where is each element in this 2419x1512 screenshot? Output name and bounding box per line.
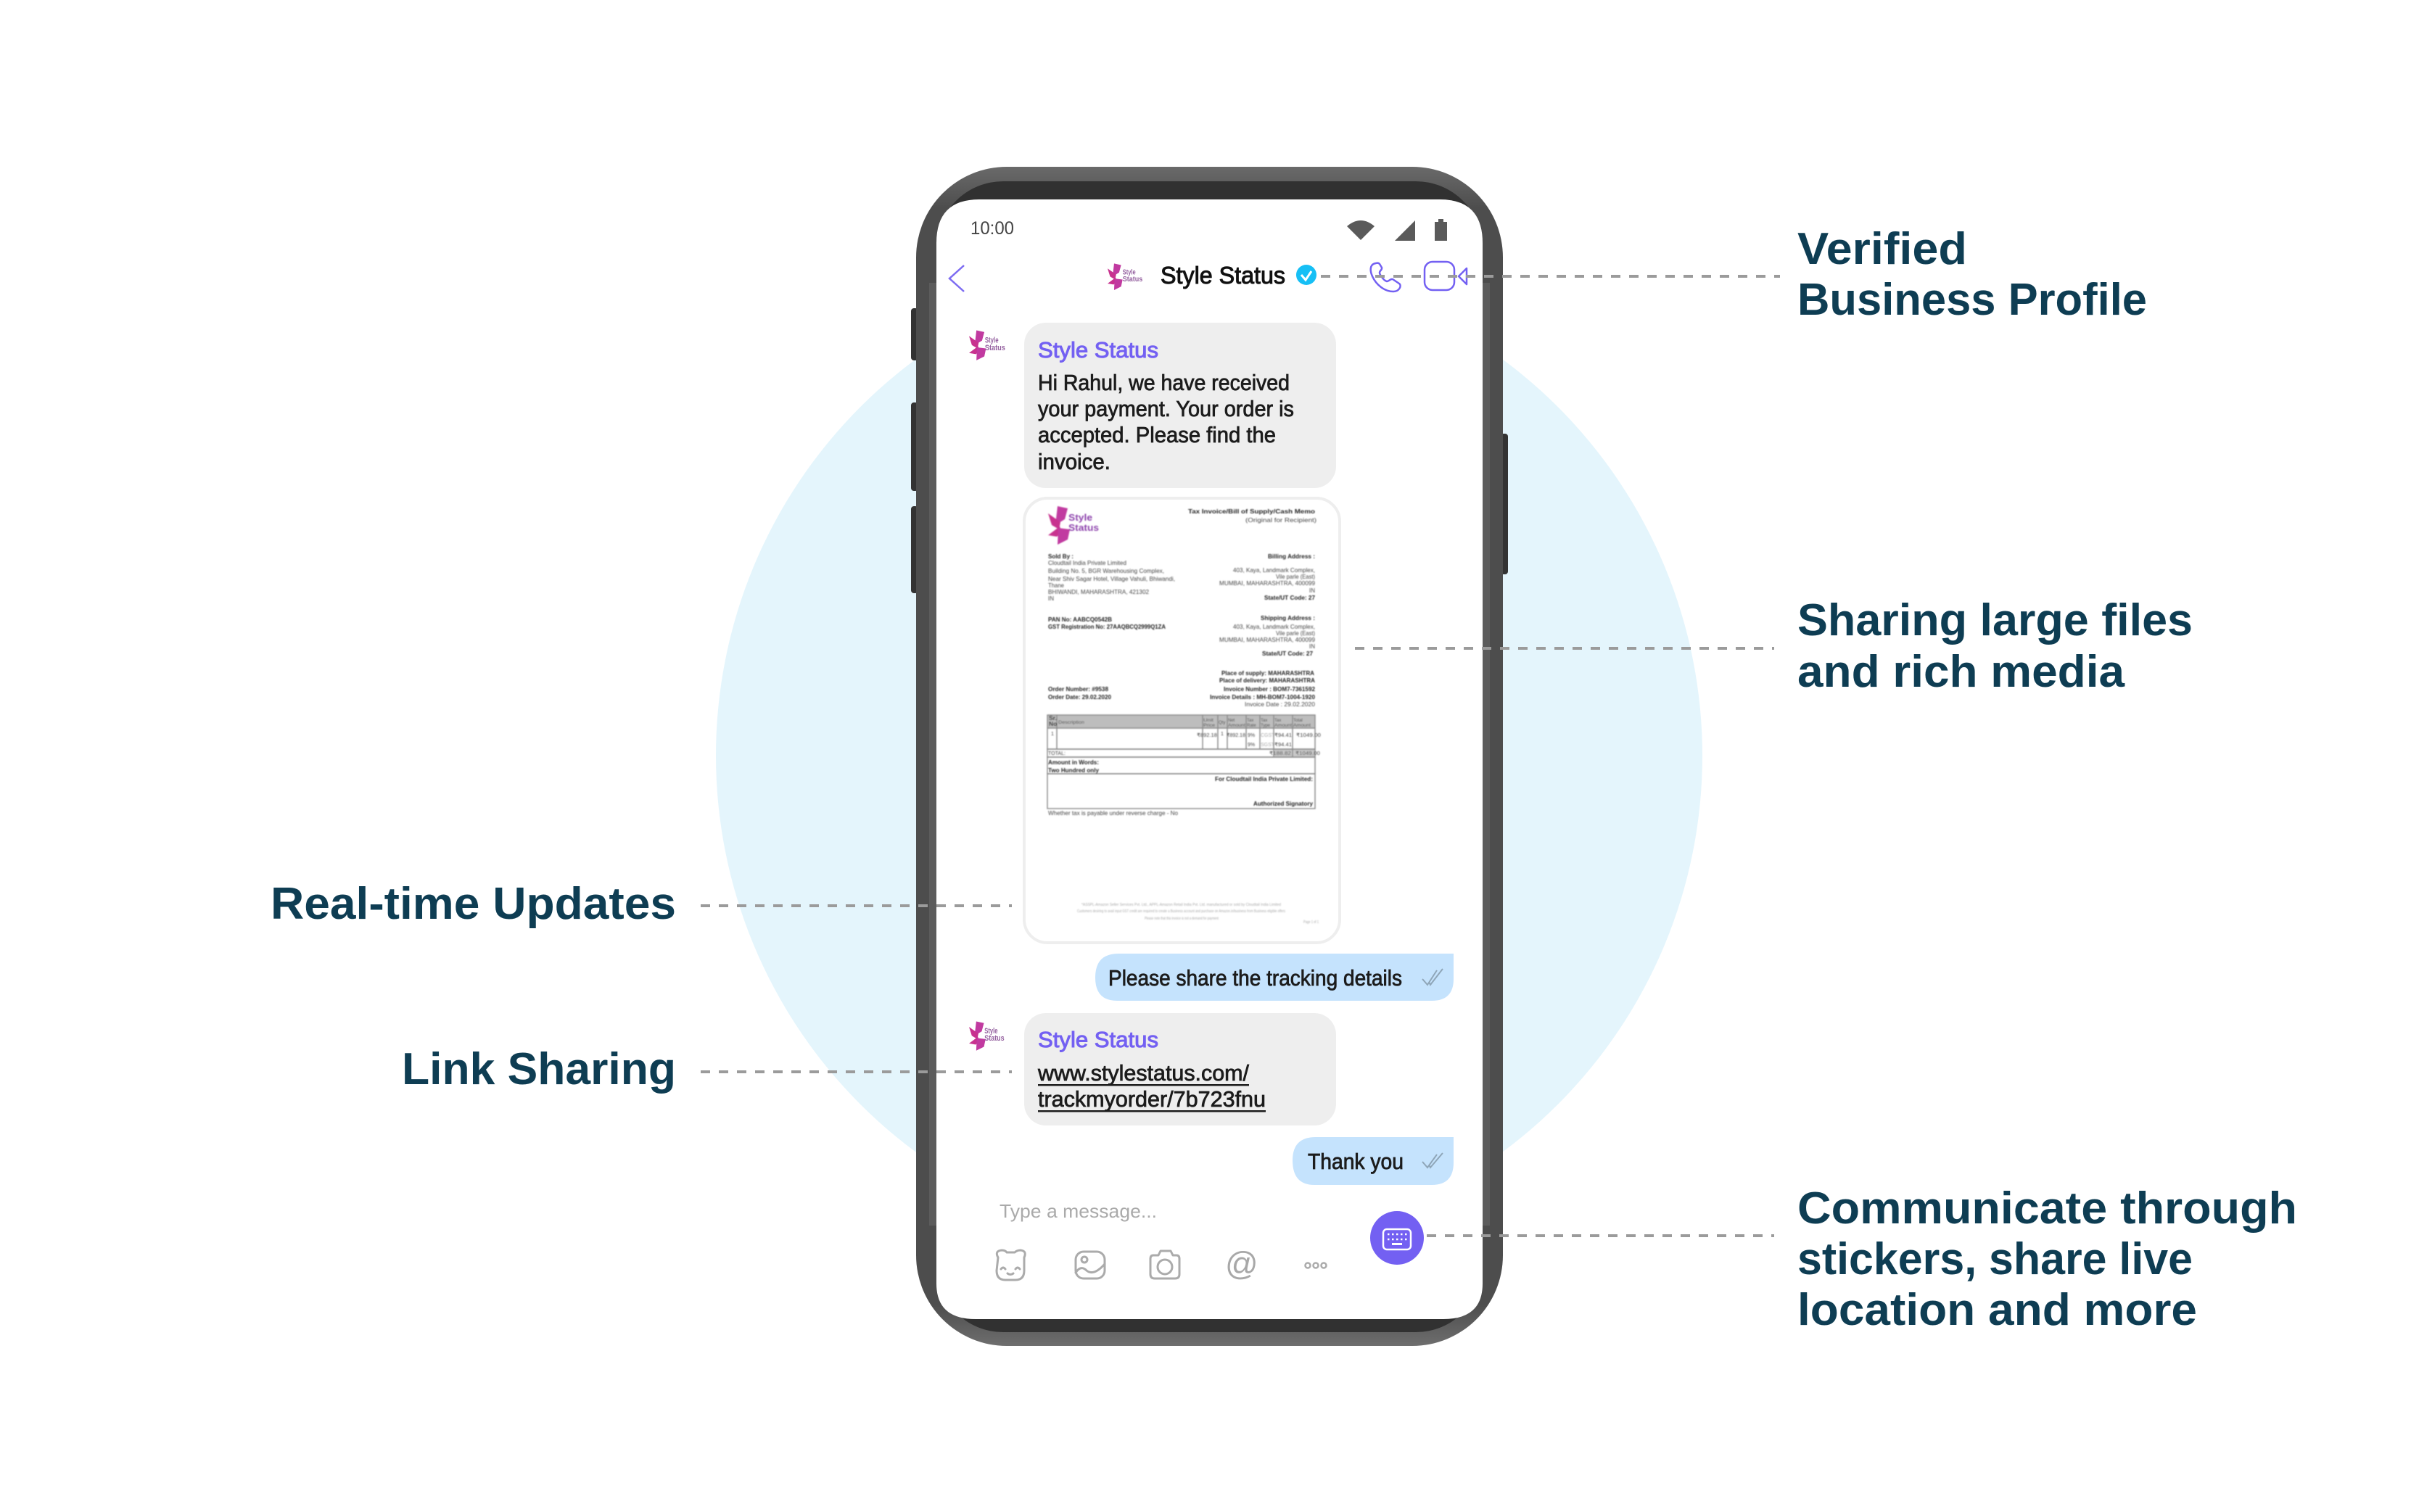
billing and shipping details: Invoice Details : MH-BOM7-1004-1920 — [1210, 693, 1315, 701]
avatar logo — [969, 1022, 1005, 1051]
invoice table: 1 — [1051, 732, 1054, 737]
message bubble — [1024, 323, 1336, 488]
invoice table: Amount — [1293, 724, 1311, 728]
message bubble: trackmyorder/7b723fnu — [1038, 1086, 1266, 1112]
invoice logo: Status — [1068, 522, 1099, 533]
label: communicate through stickers — [1797, 1183, 2297, 1335]
seller details: GST Registration No: 27AAQBCQ2999Q1ZA — [1048, 623, 1166, 630]
message bubble: accepted. Please find the — [1038, 422, 1276, 447]
seller details: Near Shiv Sagar Hotel, Village Vahuli, Bhiwandi, — [1048, 575, 1175, 582]
invoice header text: (Original for Recipient) — [1245, 516, 1316, 524]
billing and shipping details: 403, Kaya, Landmark Complex, — [1233, 566, 1315, 574]
header logo: Style — [1123, 269, 1136, 277]
billing and shipping details: 403, Kaya, Landmark Complex, — [1233, 623, 1315, 630]
phone frame — [916, 167, 1503, 1346]
connector: verified business profile — [1321, 275, 1780, 278]
invoice table: ₹892.18 — [1197, 732, 1217, 738]
invoice table: Tax — [1247, 719, 1253, 723]
billing and shipping details: Vile parle (East) — [1276, 573, 1315, 580]
invoice table: Two Hundred only — [1048, 767, 1099, 774]
invoice table: 1 — [1221, 732, 1224, 737]
header logo — [1108, 263, 1143, 290]
billing and shipping details: State/UT Code: 27 — [1264, 594, 1315, 601]
invoice contents — [1047, 506, 1321, 925]
seller details — [1048, 553, 1175, 701]
invoice logo: Style — [1068, 512, 1092, 523]
label: sharing large files — [1797, 595, 2193, 697]
invoice table: Unit — [1203, 719, 1213, 723]
connector: sharing large files — [1355, 647, 1774, 650]
invoice footer text: Page 1 of 1 — [1303, 920, 1319, 925]
outgoing message: tracking — [1095, 954, 1454, 1001]
invoice footer text — [1077, 903, 1319, 925]
message bubble: www.stylestatus.com/ — [1037, 1060, 1249, 1086]
invoice footer text: Please note that this invoice is not a demand for payment — [1145, 917, 1219, 921]
seller details: Building No. 5, BGR Warehousing Complex, — [1048, 567, 1164, 574]
invoice table: ₹1049.00 — [1296, 732, 1321, 738]
invoice table: CGST — [1261, 733, 1275, 738]
seller details: Order Date: 29.02.2020 — [1048, 693, 1111, 701]
icon: more dots — [1306, 1263, 1326, 1268]
invoice footer text: *ASSPL-Amazon Seller Services Pvt. Ltd., APPL-Amazon Retail India Pvt. Ltd. manufactured or sold by Cloudtail India Limited — [1081, 903, 1281, 907]
message bubble — [1024, 1013, 1336, 1125]
invoice table: Qty — [1219, 721, 1225, 725]
label: verified business profile — [1797, 224, 2147, 325]
background circle — [716, 263, 1702, 1249]
invoice table: Tax — [1274, 719, 1281, 723]
billing and shipping details: Place of delivery: MAHARASHTRA — [1219, 677, 1315, 684]
avatar logo: Status — [985, 344, 1005, 352]
label: verified business profile: Verified — [1797, 224, 1967, 274]
invoice header text — [1188, 508, 1316, 524]
invoice footer text: Customers desiring to avail input GST credit are required to create a Business account and purchase on Amazon.in/business from Business eligible offers — [1077, 909, 1285, 914]
seller details: Order Number: #9538 — [1048, 685, 1108, 693]
invoice table: 9% — [1248, 733, 1255, 738]
avatar logo: Status — [984, 1034, 1005, 1043]
label: link sharing: Link Sharing — [402, 1044, 676, 1094]
invoice table: ₹94.41 — [1274, 742, 1292, 748]
billing and shipping details — [1210, 553, 1315, 708]
seller details: Sold By : — [1048, 553, 1073, 560]
icon: keyboard button — [1370, 1211, 1424, 1265]
label: real-time updates: Real-time Updates — [271, 879, 676, 929]
billing and shipping details: Invoice Date : 29.02.2020 — [1245, 701, 1315, 708]
invoice document card — [1024, 498, 1340, 943]
invoice table: ₹1049.00 — [1295, 751, 1320, 756]
connector: link sharing — [701, 1070, 1012, 1073]
invoice table: Rate — [1247, 724, 1256, 728]
invoice table: 9% — [1248, 743, 1255, 748]
invoice table: ₹892.18 — [1227, 732, 1245, 738]
seller details: IN — [1048, 595, 1054, 602]
icon: camera — [1150, 1251, 1179, 1278]
invoice header text: Tax Invoice/Bill of Supply/Cash Memo — [1188, 508, 1315, 515]
icon: image — [1076, 1252, 1105, 1278]
input placeholder: Type a message... — [1000, 1200, 1157, 1222]
icon: battery — [1435, 219, 1447, 241]
frame edge highlights — [929, 283, 1490, 1226]
invoice table: Type — [1261, 724, 1271, 728]
outgoing message: thank you — [1293, 1137, 1454, 1185]
phone — [911, 167, 1508, 1346]
billing and shipping details: Invoice Number : BOM7-7361592 — [1224, 685, 1315, 693]
message bubble: Style Status — [1038, 1027, 1158, 1052]
seller details: Cloudtail India Private Limited — [1048, 559, 1126, 566]
billing and shipping details: IN — [1309, 643, 1315, 650]
invoice table: Price — [1203, 724, 1216, 728]
invoice table: Authorized Signatory — [1253, 800, 1313, 807]
invoice logo — [1048, 506, 1099, 545]
icon: phone call — [1371, 263, 1401, 292]
avatar logo — [969, 331, 1005, 360]
icon: sticker bear — [997, 1250, 1025, 1280]
billing and shipping details: State/UT Code: 27 — [1262, 650, 1313, 657]
header logo: Status — [1123, 276, 1143, 284]
invoice table: ₹188.82 — [1269, 751, 1291, 756]
billing and shipping details: IN — [1309, 587, 1315, 594]
invoice table: TOTAL: — [1048, 751, 1066, 756]
outgoing message: thank you: Thank you — [1308, 1149, 1404, 1174]
inner dark bezel — [936, 181, 1483, 1332]
billing and shipping details: Vile parle (East) — [1276, 629, 1315, 637]
invoice table: Tax — [1261, 719, 1267, 723]
invoice table: For Cloudtail India Private Limited: — [1215, 775, 1313, 782]
billing and shipping details: Billing Address : — [1268, 553, 1315, 560]
invoice table: Amount in Words: — [1048, 759, 1099, 766]
message bubble: Hi Rahul, we have received — [1038, 370, 1290, 395]
business name: Style Status — [1161, 262, 1285, 289]
invoice table: Description — [1058, 721, 1084, 725]
icon: read ticks — [1422, 969, 1443, 985]
incoming message: tracking link — [969, 1013, 1336, 1125]
message bubble: Style Status — [1038, 337, 1158, 363]
invoice table — [1047, 714, 1321, 817]
invoice table: Whether tax is payable under reverse charge - No — [1048, 809, 1178, 817]
invoice table: Sr. — [1049, 714, 1057, 722]
connector: real-time updates — [701, 904, 1012, 907]
icon: read ticks — [1422, 1153, 1443, 1168]
avatar logo: Style — [985, 336, 999, 345]
screen — [936, 199, 1483, 1319]
label: communicate through stickers: Communicate through — [1797, 1183, 2297, 1234]
avatar logo: Style — [984, 1027, 998, 1036]
seller details: BHIWANDI, MAHARASHTRA, 421302 — [1048, 588, 1149, 595]
message composer — [997, 1200, 1424, 1282]
icon: signal — [1395, 220, 1415, 241]
invoice table: Net — [1228, 719, 1235, 723]
billing and shipping details: MUMBAI, MAHARASHTRA, 400099 — [1219, 636, 1315, 643]
seller details: Thane — [1048, 582, 1064, 589]
invoice table: SGST — [1261, 743, 1275, 748]
outgoing message: tracking: Please share the tracking details — [1108, 965, 1402, 991]
billing and shipping details: Place of supply: MAHARASHTRA — [1221, 669, 1314, 677]
invoice table: Amount — [1274, 724, 1292, 728]
status bar — [971, 218, 1447, 241]
invoice table: Amount — [1228, 724, 1245, 728]
side buttons — [911, 308, 1508, 593]
icon: mention: @ — [1225, 1245, 1258, 1282]
time: 10:00 — [971, 218, 1014, 239]
billing and shipping details: MUMBAI, MAHARASHTRA, 400099 — [1219, 579, 1315, 587]
seller details: PAN No: AABCQ0542B — [1048, 616, 1112, 623]
label: sharing large files: Sharing large files — [1797, 595, 2193, 645]
label: communicate through stickers: stickers, share live — [1797, 1234, 2193, 1284]
icon: back chevron — [949, 265, 964, 292]
chat header — [949, 262, 1467, 292]
label: communicate through stickers: location and more — [1797, 1285, 2197, 1335]
connector: stickers and location — [1427, 1234, 1774, 1237]
icon: video call — [1425, 262, 1467, 290]
label: verified business profile: Business Profile — [1797, 275, 2147, 325]
message bubble: invoice. — [1038, 449, 1110, 474]
billing and shipping details: Shipping Address : — [1261, 614, 1315, 621]
icon: verified badge — [1296, 265, 1316, 285]
incoming message: payment — [969, 323, 1336, 488]
invoice table: ₹94.41 — [1274, 732, 1292, 738]
label: sharing large files: and rich media — [1797, 647, 2125, 697]
invoice table: Total — [1293, 719, 1303, 723]
message bubble: your payment. Your order is — [1038, 396, 1294, 421]
icon: wifi — [1347, 220, 1375, 240]
invoice table: No — [1049, 720, 1057, 727]
